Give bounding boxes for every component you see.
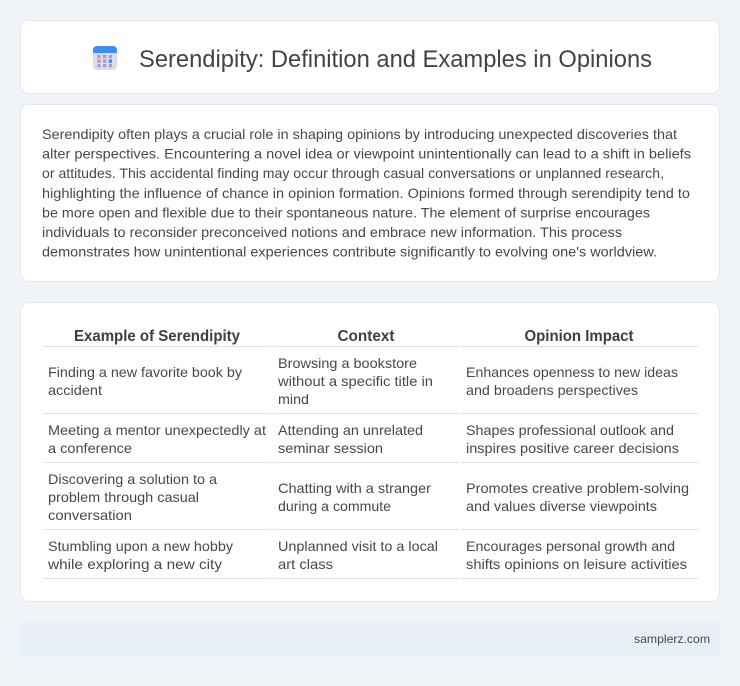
table row 2: seminar session bbox=[278, 440, 383, 456]
table header row: Opinion Impact bbox=[524, 328, 634, 345]
table row 1: Browsing a bookstore bbox=[278, 355, 417, 371]
table header row: Context bbox=[338, 328, 395, 345]
table row 4: while exploring a new city bbox=[47, 556, 222, 572]
table row 1: Enhances openness to new ideas bbox=[466, 364, 678, 380]
panel: description bbox=[20, 104, 720, 282]
table row 1 bbox=[48, 355, 678, 407]
footer source text: samplerz.com bbox=[634, 632, 710, 646]
table row 3: problem through casual bbox=[48, 489, 199, 505]
text block: description paragraph: be more open and flexible due to their spontaneous nature. The element of surprise encourages bbox=[42, 204, 650, 220]
table row 2: Shapes professional outlook and bbox=[466, 422, 674, 438]
table header row: Example of Serendipity bbox=[74, 328, 240, 345]
header card bbox=[20, 20, 720, 94]
table row 4: Stumbling upon a new hobby bbox=[48, 538, 233, 554]
table row 3: during a commute bbox=[278, 498, 391, 514]
table row 1: without a specific title in bbox=[277, 373, 433, 389]
text block: description paragraph: individuals to reconsider preconceived notions and embrace new information. This process bbox=[42, 224, 622, 240]
table row 4: Unplanned visit to a local bbox=[278, 538, 438, 554]
text block: description paragraph: highlighting the influence of chance in opinion formation. Opinions formed through serendipity tend to bbox=[42, 185, 690, 201]
table row 1: mind bbox=[278, 391, 309, 407]
table row 3: Promotes creative problem-solving bbox=[466, 480, 689, 496]
table row 2: Attending an unrelated bbox=[278, 422, 423, 438]
table row 1: Finding a new favorite book by bbox=[48, 364, 242, 380]
text block: description paragraph: or attitudes. This accidental finding may occur through casual conversations or unplanned research, bbox=[42, 165, 664, 181]
table row 3: conversation bbox=[48, 507, 132, 523]
table row 3: and values diverse viewpoints bbox=[466, 498, 657, 514]
table row 2: a conference bbox=[48, 440, 132, 456]
text block: description paragraph bbox=[42, 126, 691, 260]
table row 4: Encourages personal growth and bbox=[466, 538, 675, 554]
table row 4: shifts opinions on leisure activities bbox=[466, 556, 687, 572]
icon: calendar bbox=[93, 46, 117, 70]
table row 1: accident bbox=[48, 382, 102, 398]
table row 2: inspires positive career decisions bbox=[466, 440, 679, 456]
panel: examples table bbox=[20, 302, 720, 602]
table row 2 bbox=[48, 422, 679, 456]
table row 3: Discovering a solution to a bbox=[48, 471, 217, 487]
table row 4: art class bbox=[278, 556, 333, 572]
text block: description paragraph: alter perspectives. Encountering a novel idea or viewpoint unintentionally can lead to a shift in beliefs bbox=[42, 146, 691, 162]
text block: description paragraph: demonstrates how unintentional experiences contribute significantly to evolving one's worldview. bbox=[42, 244, 657, 260]
table row 3: Chatting with a stranger bbox=[278, 480, 431, 496]
text block: description paragraph: Serendipity often plays a crucial role in shaping opinions by introducing unexpected discoveries that bbox=[42, 126, 677, 142]
table row 4 bbox=[47, 538, 687, 572]
title: Serendipity: Definition and Examples in Opinions bbox=[139, 46, 652, 73]
footer bar bbox=[20, 622, 720, 656]
table row 2: Meeting a mentor unexpectedly at bbox=[48, 422, 266, 438]
table header row bbox=[74, 328, 634, 345]
table row 1: and broadens perspectives bbox=[466, 382, 638, 398]
table row 3 bbox=[48, 471, 689, 523]
